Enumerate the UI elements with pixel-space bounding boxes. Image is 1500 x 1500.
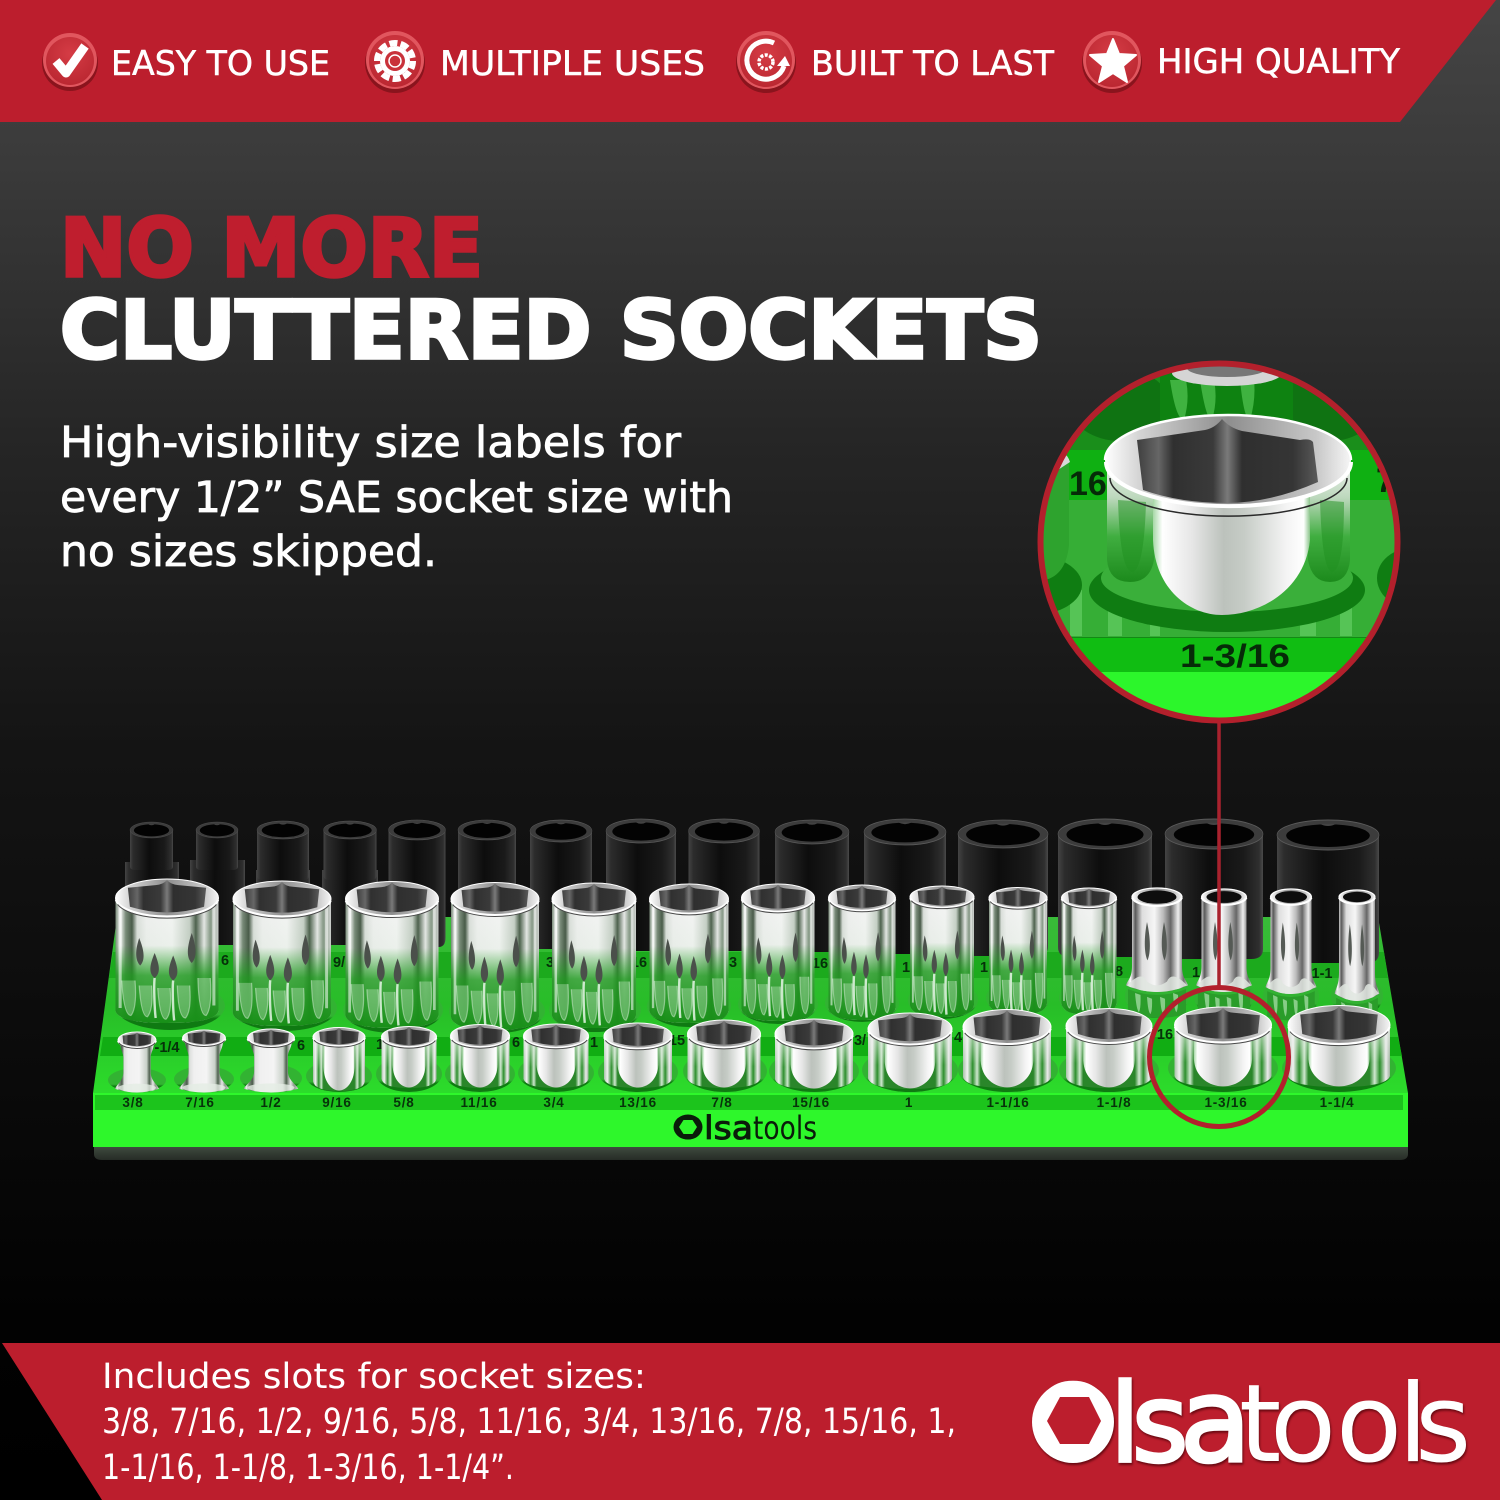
- magnified socket callout: 16: [1069, 465, 1107, 503]
- size labels on tray front: 7/8: [711, 1095, 733, 1110]
- partly hidden labels on front row: 15: [669, 1033, 685, 1049]
- socket sizes text: 1-1/16, 1-1/8, 1-3/16, 1-1/4”.: [102, 1448, 514, 1488]
- partly hidden labels on middle row: 1: [1192, 965, 1200, 981]
- partly hidden labels on middle row: 8: [1115, 964, 1123, 980]
- size labels on tray front: 1: [905, 1095, 913, 1110]
- tray front face: [93, 1093, 1408, 1160]
- feature: multiple uses: [365, 31, 705, 93]
- size labels on tray front: 1-1/16: [986, 1095, 1030, 1110]
- heading: NO MORE: [60, 202, 483, 295]
- top banner: [0, 0, 1496, 122]
- tray logo: O: [673, 1109, 703, 1147]
- tray logo: lsa: [704, 1109, 753, 1147]
- socket sizes text: Includes slots for socket sizes:: [102, 1357, 646, 1397]
- feature: multiple uses: MULTIPLE USES: [440, 44, 705, 84]
- partly hidden labels on middle row: 1: [902, 960, 910, 976]
- icon: star badge: [1082, 31, 1142, 93]
- Olsatools logo: ls: [1110, 1362, 1188, 1487]
- feature: high quality: [1082, 31, 1400, 93]
- feature: built to last: BUILT TO LAST: [811, 44, 1054, 84]
- partly hidden labels on front row: 1: [590, 1035, 598, 1051]
- partly hidden labels on middle row: /16: [627, 955, 647, 971]
- size labels on tray front: 1-1/4: [1320, 1095, 1354, 1110]
- partly hidden labels on middle row: 3: [546, 955, 554, 971]
- feature: easy to use: EASY TO USE: [111, 44, 330, 84]
- partly hidden labels on middle row: 3: [729, 955, 737, 971]
- tray logo: [673, 1109, 817, 1147]
- front row chrome sockets: [115, 1006, 1390, 1093]
- Olsatools logo: [1032, 1354, 1471, 1489]
- Olsatools logo: tools: [1239, 1362, 1471, 1487]
- callout small circle: [1150, 988, 1288, 1126]
- back row black sockets: [125, 819, 1379, 963]
- tray top surface: [93, 917, 1408, 1093]
- size labels on tray front: 15/16: [792, 1095, 830, 1110]
- bottom banner: [2, 1343, 1500, 1500]
- icon: gear badge: [365, 31, 425, 93]
- socket sizes text: [102, 1357, 956, 1488]
- partly hidden labels on front row: 1: [376, 1037, 384, 1053]
- size labels on tray front: 1-3/16: [1204, 1095, 1248, 1110]
- tray logo: tools: [753, 1109, 817, 1147]
- size labels on tray front: 3/4: [543, 1095, 565, 1110]
- icon: refresh gear badge: [736, 31, 796, 93]
- size labels on tray front: 9/16: [322, 1095, 352, 1110]
- Olsatools logo: a: [1180, 1354, 1251, 1489]
- description text: every 1/2” SAE socket size with: [60, 473, 733, 523]
- description text: no sizes skipped.: [60, 527, 437, 577]
- description text: [60, 418, 733, 577]
- size labels on tray front: 1-1/8: [1097, 1095, 1131, 1110]
- magnified socket callout: [1038, 360, 1400, 724]
- partly hidden labels on front row: [154, 1027, 1173, 1056]
- middle row chrome sockets: [116, 879, 1379, 1030]
- partly hidden labels on front row: 4: [954, 1030, 962, 1046]
- partly hidden labels on front row: 16: [1157, 1027, 1173, 1043]
- socket sizes text: 3/8, 7/16, 1/2, 9/16, 5/8, 11/16, 3/4, 13/16, 7/8, 15/16, 1,: [102, 1402, 956, 1442]
- feature: easy to use: [42, 33, 330, 91]
- partly hidden labels on front row: 6: [512, 1035, 520, 1051]
- partly hidden labels on middle row: 1: [980, 960, 988, 976]
- partly hidden labels on front row: -1/4: [154, 1040, 180, 1056]
- middle row sockets holes: [115, 974, 1383, 1033]
- size labels on tray front: 1/2: [260, 1095, 282, 1110]
- size labels on tray front: 13/16: [619, 1095, 657, 1110]
- partly hidden labels on middle row: 6: [221, 953, 229, 969]
- partly hidden labels on middle row: 9/: [333, 955, 345, 971]
- heading: [60, 202, 1042, 377]
- partly hidden labels on front row: 3/: [854, 1033, 866, 1049]
- heading: CLUTTERED SOCKETS: [60, 284, 1042, 377]
- partly hidden labels on middle row: [221, 953, 1332, 982]
- Olsatools logo: O: [1032, 1362, 1114, 1487]
- front row socket holes: [108, 1044, 1396, 1092]
- feature: high quality: HIGH QUALITY: [1157, 42, 1400, 82]
- description text: High-visibility size labels for: [60, 418, 681, 468]
- magnified socket callout: 1-3/16: [1180, 638, 1290, 674]
- size labels on tray front: [122, 1095, 1354, 1110]
- callout line: [1217, 720, 1221, 988]
- partly hidden labels on middle row: 1-1: [1312, 966, 1332, 982]
- partly hidden labels on middle row: 16: [812, 956, 828, 972]
- size labels on tray front: 11/16: [460, 1095, 498, 1110]
- size labels on tray front: 7/16: [185, 1095, 215, 1110]
- size labels on tray front: 5/8: [393, 1095, 415, 1110]
- icon: check badge: [42, 33, 98, 91]
- size labels on tray front: 3/8: [122, 1095, 144, 1110]
- socket tray product: [93, 819, 1408, 1160]
- feature: built to last: [736, 31, 1054, 93]
- partly hidden labels on front row: 6: [297, 1038, 305, 1054]
- magnified socket callout: 7: [1376, 462, 1395, 500]
